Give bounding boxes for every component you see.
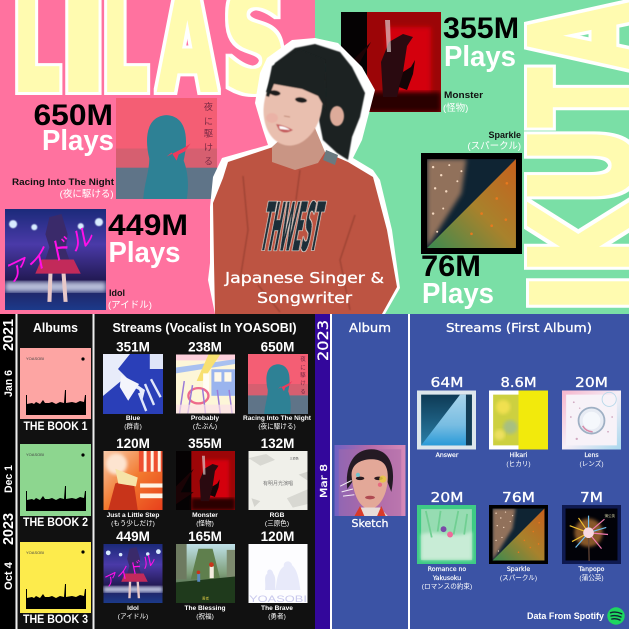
song: Lens: 20M [575,376,608,391]
song: Racing Into The Night: 650M [261,340,294,354]
stat: Idol 449M plays: 449M [108,209,188,242]
stat: Idol 449M plays: Plays [108,237,180,269]
stat: Racing Into The Night 650M plays [12,99,114,200]
song: Lens: Lens [584,452,599,459]
song: RGB: RGB [270,512,285,519]
heading: Albums: Albums [33,321,78,335]
song: The Brave [248,529,308,620]
song: Romance no Yakusoku [417,491,476,590]
portrait: Lilas Ikuta cut-out photo [208,38,400,314]
song: Monster [176,436,235,528]
song: RGB: (三原色) [265,518,289,528]
album: THE BOOK 3: YOASOBI [26,550,44,555]
song: Answer: Answer [436,452,459,459]
song: Lens: (レンズ) [579,459,604,468]
caption: Japanese Singer and Songwriter: Songwriter [257,289,353,307]
song: Racing Into The Night: Racing Into The Night [243,415,312,422]
song: Romance no Yakusoku: (ロマンスの約束) [422,582,472,590]
stat: Idol 449M plays [108,209,188,311]
song: Idol [101,529,162,620]
song: Answer [417,376,476,459]
stat: Racing Into The Night 650M plays: (夜に駆ける) [60,189,114,200]
song: Probably: 238M [188,340,222,354]
timeline: YOASOBI dates: Oct 4 [3,561,15,590]
song: Blue: Blue [126,415,140,422]
stat: Sparkle 76M plays: Sparkle [488,130,521,140]
song: Hikari [489,376,548,468]
song: The Brave: 120M [261,529,294,544]
album: Sketch: Sketch [352,517,389,530]
song: Hikari: Hikari [510,452,528,459]
stat: Sparkle 76M plays: (スパークル) [467,141,521,152]
song: Racing Into The Night: (夜に駆ける) [258,422,296,430]
timeline: YOASOBI dates [0,319,17,590]
title: IKUTA [502,3,629,315]
song: RGB: 132M [261,436,294,451]
song: Just a Little Step [104,436,162,528]
song: Tanpopo: Tanpopo [578,566,605,573]
stat: Racing Into The Night 650M plays: Racing Into The Night [12,177,114,187]
album: THE BOOK 3: THE BOOK 3 [23,614,88,626]
source credit: Data From Spotify [527,607,625,625]
song: Tanpopo [562,491,621,582]
album cover: Racing Into The Night [116,98,217,199]
timeline: solo date: Mar 8 [319,464,330,498]
album: THE BOOK 1: THE BOOK 1 [24,421,88,433]
song: Sparkle [489,491,548,582]
song: Romance no Yakusoku: Romance no [428,566,466,573]
song: Monster: (怪物) [196,518,214,528]
icon: Spotify logo [607,607,625,625]
album cover: Monster [341,12,441,112]
song: Just a Little Step: (もう少しだけ) [111,518,155,528]
song: Monster: 355M [188,436,222,451]
stat: Racing Into The Night 650M plays: 650M [34,99,113,132]
album: THE BOOK 3 [20,542,91,626]
song: Idol: 449M [116,529,150,544]
album: THE BOOK 1: YOASOBI [26,356,44,361]
song: Sparkle: Sparkle [507,566,530,573]
song: Answer: 64M [430,376,464,391]
stat: Monster 355M plays: Monster [444,90,484,100]
panel: solo discography [315,314,629,629]
song: Sparkle: 76M [502,491,535,506]
source credit: Data From Spotify: Data From Spotify [527,611,604,621]
album: THE BOOK 2 [20,444,91,529]
panel: pink background, Lilas Ikuta as YOASOBI vocalist [0,0,315,315]
text: THWEST [256,189,329,266]
stat: Monster 355M plays [443,12,519,114]
song: Just a Little Step: Just a Little Step [107,512,159,519]
album: THE BOOK 1 [20,348,91,433]
song: Romance no Yakusoku: Yakusoku [432,575,461,582]
timeline: YOASOBI dates: Dec 1 [3,465,15,493]
timeline: YOASOBI dates: Jan 6 [3,370,15,397]
song: The Blessing [176,529,235,620]
album: THE BOOK 2: YOASOBI [26,452,44,457]
song: Tanpopo: (蒲公英) [579,573,604,582]
song: The Blessing: 165M [188,529,222,544]
song: Idol: Idol [127,605,139,612]
timeline: YOASOBI dates: 2023 [0,513,17,545]
song: RGB [248,436,308,528]
caption: Japanese Singer and Songwriter [224,269,384,307]
stat: Sparkle 76M plays [421,130,521,310]
stat: Monster 355M plays: (怪物) [443,102,468,114]
heading: Streams (Vocalist In YOASOBI): Streams (Vocalist In YOASOBI) [112,321,296,335]
stat: Sparkle 76M plays: 76M [421,250,481,283]
song: The Blessing: The Blessing [184,605,226,612]
stat: Racing Into The Night 650M plays: Plays [42,125,114,157]
timeline: solo date: 2023 [316,320,332,361]
song: Idol: (アイドル) [118,612,148,620]
song: Racing Into The Night [243,340,312,430]
panel: YOASOBI discography [0,314,315,629]
song: Sparkle: (スパークル) [500,574,537,582]
stat: Monster 355M plays: Plays [444,41,516,73]
song: Romance no Yakusoku: 20M [430,491,464,506]
song: Probably: Probably [191,415,219,422]
song: Monster: Monster [192,512,218,519]
song: Blue: 351M [116,340,150,354]
song: The Blessing: (祝福) [196,612,214,620]
caption: Japanese Singer and Songwriter: Japanese Singer & [224,269,384,287]
heading: Album: Album [349,321,391,335]
song: Lens [562,376,621,468]
album: THE BOOK 2: THE BOOK 2 [23,517,88,529]
heading: Streams (First Album): Streams (First Album) [446,321,592,335]
song: The Brave: The Brave [261,605,293,612]
song: Hikari: (ヒカリ) [506,460,531,468]
title: LILAS [13,0,286,124]
stat: Idol 449M plays: Idol [109,288,125,298]
song: Just a Little Step: 120M [116,436,150,451]
stat: Idol 449M plays: (アイドル) [108,300,152,311]
timeline: YOASOBI dates: 2021 [0,319,17,351]
song: Blue: (群青) [124,422,142,430]
stat: Monster 355M plays: 355M [443,12,519,45]
song: Blue [103,340,163,430]
song: The Brave: (勇者) [268,612,286,620]
album cover: Sparkle [421,153,522,254]
song: Tanpopo: 7M [580,491,603,506]
song: Hikari: 8.6M [500,376,536,391]
album cover: Idol [0,209,106,310]
timeline: solo date [316,320,332,498]
song: Probably [176,340,235,430]
panel: green background, Lilas Ikuta solo [315,0,629,315]
album: Sketch [334,445,406,530]
song: Probably: (たぶん) [193,422,217,430]
stat: Sparkle 76M plays: Plays [422,278,494,310]
